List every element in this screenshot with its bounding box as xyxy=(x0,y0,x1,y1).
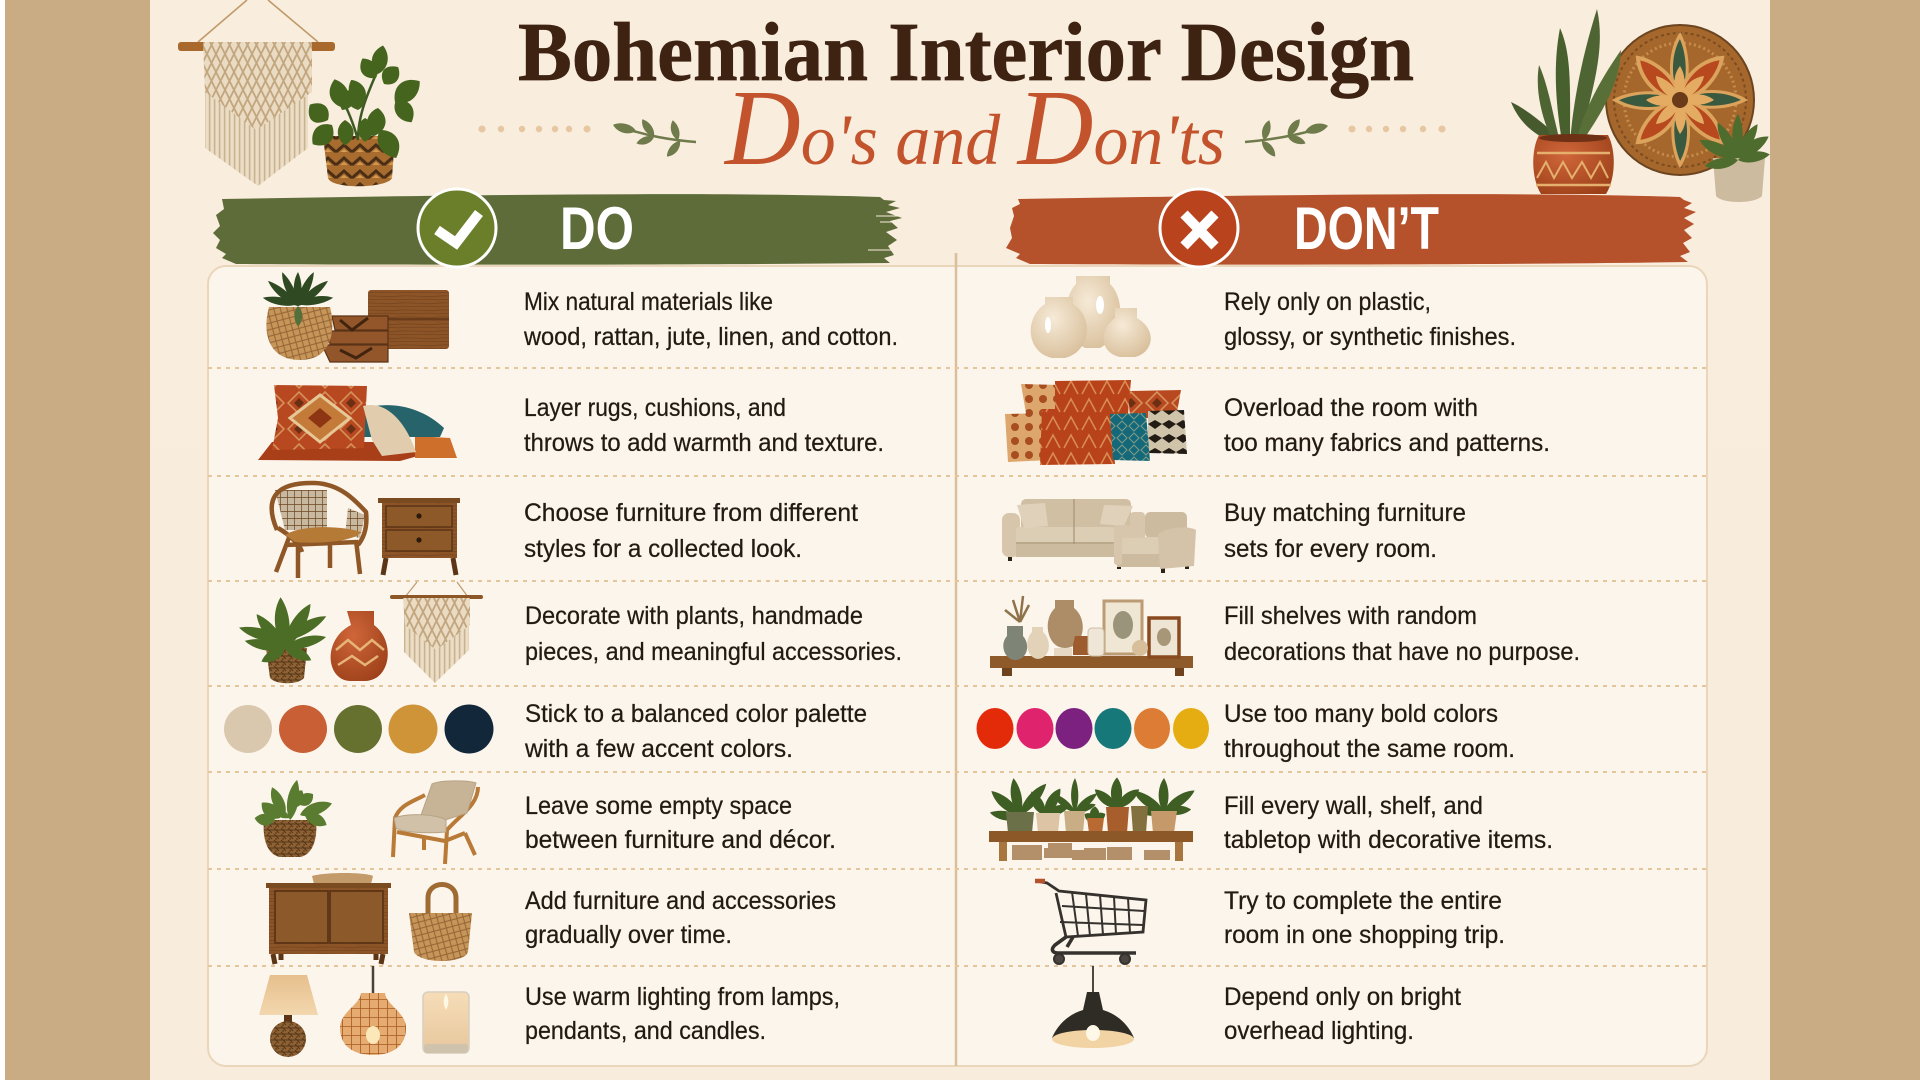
dont text: row 8: Depend only on bright xyxy=(1224,983,1461,1011)
row 8 dont illustration: overhead pendant xyxy=(1052,966,1134,1048)
decor: macrame wall hanging xyxy=(178,0,335,186)
decor: round woven wall basket xyxy=(1606,25,1754,175)
dont text: row 3: Buy matching furniture xyxy=(1224,499,1466,527)
row 7 dont illustration: shopping cart xyxy=(1035,881,1146,964)
dont text: row 2: too many fabrics and patterns. xyxy=(1224,429,1550,457)
DO label: DO xyxy=(560,195,634,262)
table card xyxy=(208,253,1707,1066)
ornament: right dots xyxy=(1348,126,1446,132)
row 5 do illustration: balanced palette xyxy=(224,704,494,754)
do text: row 2 xyxy=(524,394,884,457)
do text: row 6 xyxy=(525,792,836,854)
dont text: row 5: Use too many bold colors xyxy=(1224,700,1498,728)
do text: row 4 xyxy=(525,602,902,666)
row 4 dont illustration: cluttered shelf xyxy=(990,596,1193,676)
dont text: row 5 xyxy=(1224,700,1515,763)
do text: row 4: pieces, and meaningful accessories. xyxy=(525,638,902,666)
icon: cross badge xyxy=(1160,189,1238,267)
ornament: left sprig xyxy=(612,117,696,159)
dont text: row 5: throughout the same room. xyxy=(1224,735,1515,763)
dont text: row 4: decorations that have no purpose. xyxy=(1224,638,1580,666)
title: Bohemian Interior Design xyxy=(518,6,1414,99)
do text: row 8: Use warm lighting from lamps, xyxy=(525,983,840,1011)
do text: row 1 xyxy=(523,288,898,351)
header: DON'T banner xyxy=(1006,189,1696,267)
row 1 do illustration: basket, textiles, wood xyxy=(262,270,449,362)
dont text: row 7: room in one shopping trip. xyxy=(1224,921,1505,949)
do text: row 7: gradually over time. xyxy=(525,921,732,949)
row 2 dont illustration: too many pillows xyxy=(1005,380,1187,465)
decor: small plant in stone pot xyxy=(1697,114,1772,202)
decor: snake plant in terracotta pot xyxy=(1511,9,1621,194)
do text: row 8 xyxy=(525,983,840,1045)
dont text: row 1: glossy, or synthetic finishes. xyxy=(1224,323,1516,351)
dont text: row 6 xyxy=(1224,792,1553,854)
do text: row 8: pendants, and candles. xyxy=(525,1017,766,1045)
row 4 do illustration: plant, vase, macrame xyxy=(237,582,483,683)
do text: row 1: wood, rattan, jute, linen, and cotton. xyxy=(523,323,898,351)
row 1 dont illustration: glossy vases xyxy=(1031,276,1151,358)
dont text: row 1: Rely only on plastic, xyxy=(1224,288,1431,316)
DON'T label: DON’T xyxy=(1294,195,1439,262)
do text: row 3 xyxy=(524,499,858,563)
dont text: row 8: overhead lighting. xyxy=(1224,1017,1414,1045)
do text: row 3: styles for a collected look. xyxy=(524,535,802,563)
dont text: row 7: Try to complete the entire xyxy=(1224,887,1502,915)
do text: row 2: Layer rugs, cushions, and xyxy=(524,394,786,422)
dont text: row 7 xyxy=(1224,887,1505,949)
do text: row 2: throws to add warmth and texture. xyxy=(524,429,884,457)
dont text: row 6: Fill every wall, shelf, and xyxy=(1224,792,1483,820)
header: DO banner xyxy=(213,189,902,267)
row 5 dont illustration: too many bold colors xyxy=(976,708,1209,749)
dont text: row 3 xyxy=(1224,499,1466,563)
dont text: row 6: tabletop with decorative items. xyxy=(1224,826,1553,854)
row 7 do illustration: sideboard and basket bag xyxy=(266,873,472,964)
do text: row 6: between furniture and décor. xyxy=(525,826,836,854)
subtitle: Do's and Don'ts xyxy=(723,69,1225,188)
decor: potted plant xyxy=(303,44,426,186)
do text: row 5: with a few accent colors. xyxy=(524,735,793,763)
do text: row 5 xyxy=(524,700,867,763)
do text: row 6: Leave some empty space xyxy=(525,792,792,820)
dont text: row 1 xyxy=(1224,288,1516,351)
row 3 dont illustration: matching sofa set xyxy=(1002,499,1196,573)
do text: row 3: Choose furniture from different xyxy=(524,499,858,527)
row 6 dont illustration: overloaded plant table xyxy=(988,777,1197,861)
ornament: left dots xyxy=(478,126,590,132)
row 8 do illustration: lamp, pendant, candle xyxy=(259,966,469,1057)
do text: row 7 xyxy=(525,887,836,949)
dont text: row 4: Fill shelves with random xyxy=(1224,602,1477,630)
icon: check badge xyxy=(418,189,496,267)
row 3 do illustration: rattan chair and nightstand xyxy=(272,483,460,578)
do text: row 1: Mix natural materials like xyxy=(524,288,773,316)
dont text: row 3: sets for every room. xyxy=(1224,535,1437,563)
do text: row 7: Add furniture and accessories xyxy=(525,887,836,915)
row 2 do illustration: cushions and throw xyxy=(258,385,457,461)
do text: row 4: Decorate with plants, handmade xyxy=(525,602,863,630)
row 6 do illustration: plant and armchair xyxy=(254,779,478,864)
dont text: row 2: Overload the room with xyxy=(1224,394,1478,422)
ornament: right sprig xyxy=(1245,117,1329,159)
do text: row 5: Stick to a balanced color palette xyxy=(525,700,867,728)
dont text: row 4 xyxy=(1224,602,1580,666)
dont text: row 8 xyxy=(1224,983,1461,1045)
dont text: row 2 xyxy=(1224,394,1550,457)
